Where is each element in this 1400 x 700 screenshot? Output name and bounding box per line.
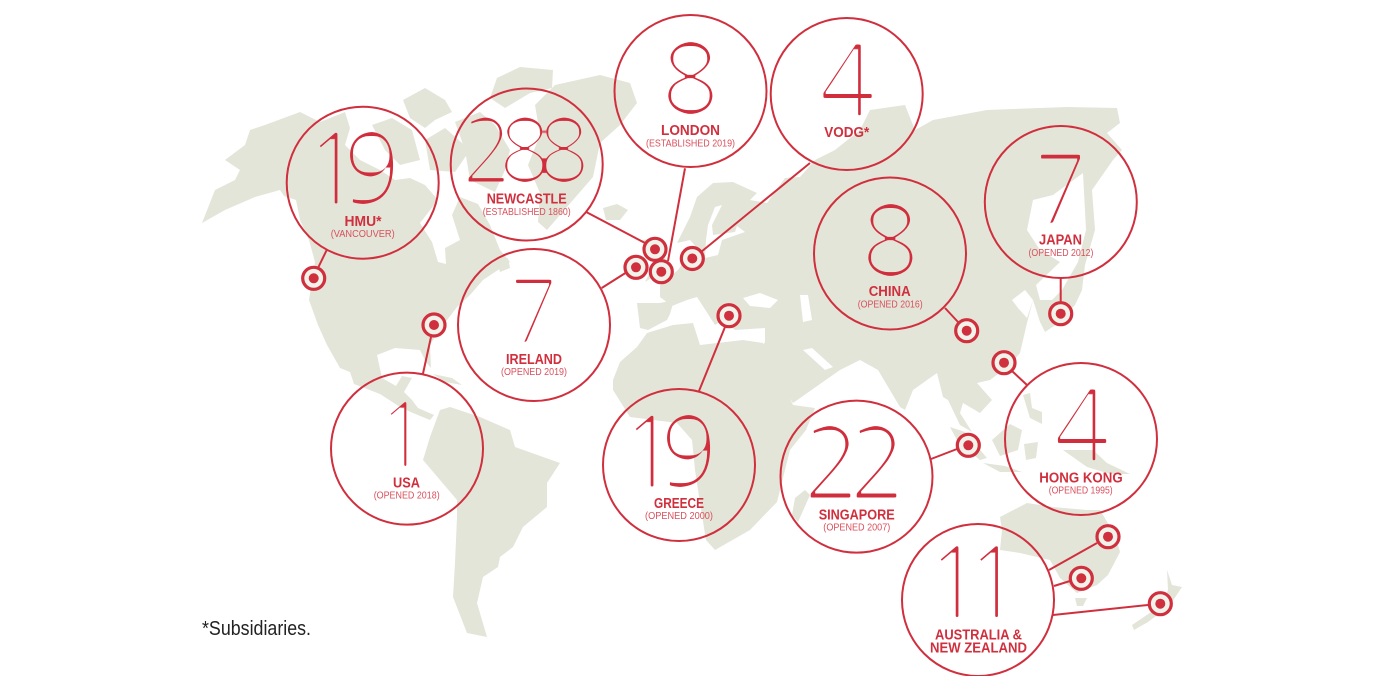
callout: HMU: (VANCOUVER) — [331, 228, 395, 240]
Eurasia — [660, 105, 1122, 432]
Iberia — [637, 300, 674, 330]
Africa — [613, 323, 815, 550]
callout: Australia and New Zealand: NEW ZEALAND — [930, 640, 1027, 656]
world map — [202, 67, 1182, 637]
callout: Singapore: (OPENED 2007) — [823, 521, 890, 533]
callout: HMU — [287, 107, 439, 259]
callout: HMU: 19 — [304, 121, 401, 218]
callout: London: (ESTABLISHED 2019) — [646, 138, 735, 150]
callout: Hong Kong: (OPENED 1995) — [1049, 485, 1113, 497]
Yellow Sea — [1012, 290, 1033, 318]
callout: USA — [331, 373, 483, 525]
callout: Newcastle: (ESTABLISHED 1860) — [483, 206, 571, 218]
callout: China: CHINA — [869, 284, 911, 300]
callout: London: LONDON — [661, 123, 720, 139]
callout: Hong Kong: 4 — [1053, 378, 1111, 475]
connector lines — [318, 163, 1148, 615]
callout: London: 8 — [661, 31, 719, 128]
callout: Hong Kong: HONG KONG — [1039, 470, 1123, 486]
callout: Singapore — [780, 401, 932, 553]
pin: VODG — [681, 248, 703, 270]
North America — [202, 112, 510, 420]
Black Sea — [743, 293, 778, 308]
pin: New Zealand — [1149, 593, 1171, 615]
Okhotsk and Sea of Japan — [1027, 173, 1086, 300]
Sumatra — [950, 427, 987, 460]
pin: Hong Kong — [993, 352, 1015, 374]
Madagascar — [792, 490, 810, 522]
Canadian Arctic islands — [403, 88, 452, 128]
Newfoundland — [497, 258, 510, 272]
footnote: *Subsidiaries. — [202, 618, 311, 640]
callout: Singapore: 22 — [803, 415, 907, 512]
callout: Hong Kong — [1005, 363, 1157, 515]
Sulawesi — [1024, 442, 1038, 460]
callout: VODG: VODG* — [824, 125, 870, 141]
Greenland — [528, 75, 637, 230]
Australia — [1000, 503, 1120, 593]
Baltic Sea — [705, 205, 745, 258]
South America — [423, 407, 560, 637]
Java — [983, 463, 1022, 472]
pin: Australia south — [1070, 567, 1092, 589]
callout: Greece: GREECE — [654, 496, 704, 512]
callout: Greece — [603, 389, 755, 541]
callout: USA: (OPENED 2018) — [374, 490, 440, 502]
callout: China: (OPENED 2016) — [858, 299, 923, 311]
callout: Japan — [985, 126, 1137, 278]
callout: Australia and New Zealand: 11 — [925, 534, 1023, 632]
pin: USA — [423, 314, 445, 336]
pin: Vancouver — [303, 267, 325, 289]
pin: China — [956, 320, 978, 342]
callout: Greece: 19 — [620, 404, 718, 501]
callout: HMU: HMU* — [344, 214, 382, 230]
Caribbean islands — [433, 374, 462, 385]
location pins — [303, 238, 1171, 615]
callout: Ireland: (OPENED 2019) — [501, 366, 567, 378]
pin: Greece — [718, 305, 740, 327]
pin: London — [650, 261, 672, 283]
callout: China: 8 — [861, 193, 919, 290]
callout: Ireland — [458, 249, 610, 401]
callout: VODG: 4 — [818, 33, 877, 130]
Tasmania — [1075, 598, 1087, 606]
callout: London — [614, 15, 766, 167]
pin: Australia north — [1097, 526, 1119, 548]
callout: Japan: JAPAN — [1039, 232, 1082, 248]
New Guinea — [1063, 450, 1130, 474]
callout: China — [814, 178, 966, 330]
bottom crop mask — [0, 676, 1400, 700]
Ellesmere Island — [490, 67, 553, 108]
callout: USA: USA — [393, 475, 420, 491]
callout: Newcastle: NEWCASTLE — [487, 191, 567, 207]
inland seas — [705, 173, 1086, 370]
Caspian Sea — [800, 295, 812, 322]
callout: USA: 1 — [376, 392, 429, 480]
callout: Ireland: IRELAND — [506, 352, 562, 368]
pin: Ireland — [625, 256, 647, 278]
callout: VODG — [771, 18, 923, 170]
callout: Japan: 7 — [1033, 144, 1089, 238]
Borneo — [992, 424, 1022, 456]
callout: Newcastle — [451, 88, 603, 240]
New Zealand — [1164, 570, 1182, 602]
Great Britain and Ireland — [642, 238, 668, 282]
Iceland — [603, 204, 628, 220]
callout: Newcastle: 288 — [461, 108, 590, 195]
Philippines — [1023, 393, 1042, 424]
pin: Singapore — [957, 434, 979, 456]
callout: Australia and New Zealand — [902, 524, 1054, 676]
callout: Japan: (OPENED 2012) — [1028, 247, 1094, 259]
Baffin Island — [455, 112, 510, 192]
callout: Greece: (OPENED 2000) — [645, 510, 713, 522]
Persian Gulf — [803, 348, 833, 370]
pin: Newcastle — [644, 238, 666, 260]
callout: Australia and New Zealand: AUSTRALIA & — [935, 627, 1022, 643]
callout: Singapore: SINGAPORE — [819, 507, 895, 523]
pin: Japan — [1050, 303, 1072, 325]
callout: Ireland: 7 — [508, 270, 560, 356]
